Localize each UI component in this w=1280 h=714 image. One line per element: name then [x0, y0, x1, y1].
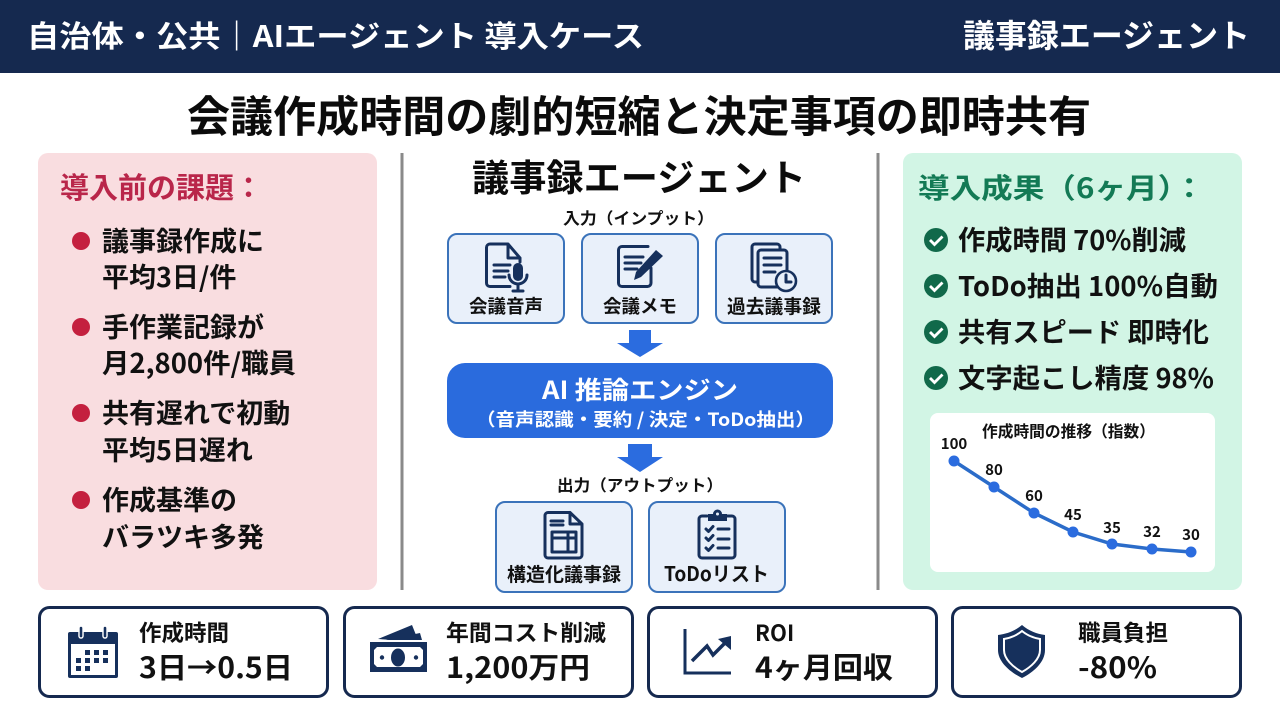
chart title: 作成時間の推移（指数） — [982, 418, 1155, 442]
input card: past minutes — [716, 234, 832, 323]
icon: document with table — [545, 512, 582, 558]
AI engine box — [447, 363, 833, 438]
data line — [954, 461, 1191, 552]
results heading: 導入成果（6ヶ月）： — [918, 167, 1205, 207]
challenge 3 — [72, 392, 290, 468]
icon: banknotes — [370, 625, 427, 672]
main title: 会議作成時間の劇的短縮と決定事項の即時共有 — [187, 83, 1091, 145]
KPI label: 年間コスト削減 — [446, 616, 606, 648]
panel: agent workflow — [447, 148, 833, 592]
header title: 自治体・公共｜AIエージェント 導入ケース — [27, 12, 644, 56]
icon: document with microphone — [486, 244, 527, 291]
input label: 入力（インプット） — [563, 205, 714, 229]
label: 会議音声 — [469, 293, 543, 319]
icon: rising chart — [685, 629, 731, 673]
challenges heading: 導入前の課題： — [60, 165, 263, 207]
KPI card: staff burden — [952, 608, 1240, 696]
arrow: input to engine — [617, 330, 663, 357]
challenge 2: 月2,800件/職員 — [102, 342, 296, 381]
icon: memo with pencil — [618, 246, 663, 286]
KPI card: ROI — [648, 608, 936, 696]
challenge 3: 平均5日遅れ — [102, 429, 253, 468]
KPI value: -80% — [1078, 645, 1157, 687]
KPI label: ROI — [755, 616, 794, 648]
label: ToDoリスト — [664, 558, 769, 587]
challenge 4: 作成基準の — [102, 479, 237, 518]
data labels: 32 — [1143, 521, 1161, 542]
panel: challenges before adoption — [38, 153, 377, 590]
label: 構造化議事録 — [507, 560, 621, 587]
result 2: ToDo抽出 100%自動 — [958, 265, 1218, 304]
result 1: 作成時間 70%削減 — [958, 219, 1186, 258]
label: 過去議事録 — [727, 292, 821, 319]
icon: shield — [998, 625, 1045, 678]
engine subtitle: （音声認識・要約 / 決定・ToDo抽出） — [476, 406, 815, 432]
output card: ToDo list — [649, 502, 785, 592]
label: 会議メモ — [603, 293, 677, 319]
challenge 1: 平均3日/件 — [102, 256, 236, 295]
data points — [948, 456, 1196, 558]
challenge 4: バラツキ多発 — [102, 516, 264, 555]
data labels: 60 — [1025, 485, 1043, 506]
data labels: 45 — [1064, 504, 1082, 525]
arrow: engine to output — [617, 444, 663, 472]
challenge 2: 手作業記録が — [102, 306, 264, 345]
output label: 出力（アウトプット） — [557, 472, 723, 496]
KPI card: creation time — [40, 608, 328, 696]
panel: results after six months — [903, 153, 1242, 590]
output card: structured minutes — [496, 502, 632, 592]
KPI value: 4ヶ月回収 — [755, 645, 893, 687]
workflow heading: 議事録エージェント — [472, 148, 806, 202]
challenge 4 — [72, 479, 264, 555]
header agent name: 議事録エージェント — [963, 11, 1250, 57]
icon: documents with clock — [752, 244, 796, 291]
challenge 1 — [72, 220, 264, 295]
challenge 3: 共有遅れで初動 — [102, 392, 290, 431]
KPI card: annual cost reduction — [344, 608, 632, 696]
icon: clipboard checklist — [699, 510, 735, 558]
data labels: 35 — [1103, 517, 1121, 538]
data labels: 100 — [941, 433, 967, 454]
KPI label: 職員負担 — [1078, 616, 1168, 648]
KPI value: 1,200万円 — [446, 645, 590, 687]
challenge 1: 議事録作成に — [102, 220, 264, 259]
data labels: 80 — [985, 459, 1003, 480]
data labels: 30 — [1182, 524, 1200, 545]
result 3: 共有スピード 即時化 — [958, 311, 1209, 350]
line chart: creation time index — [930, 413, 1215, 572]
header bar — [0, 0, 1280, 73]
KPI label: 作成時間 — [139, 616, 229, 648]
result 4: 文字起こし精度 98% — [958, 357, 1214, 396]
engine title: AI 推論エンジン — [541, 371, 738, 407]
data labels — [941, 433, 1200, 545]
KPI value: 3日→0.5日 — [139, 645, 293, 687]
input card: meeting memo — [582, 234, 698, 323]
icon: calendar — [68, 628, 118, 678]
challenge 2 — [72, 306, 296, 381]
input card: meeting audio — [448, 234, 564, 323]
